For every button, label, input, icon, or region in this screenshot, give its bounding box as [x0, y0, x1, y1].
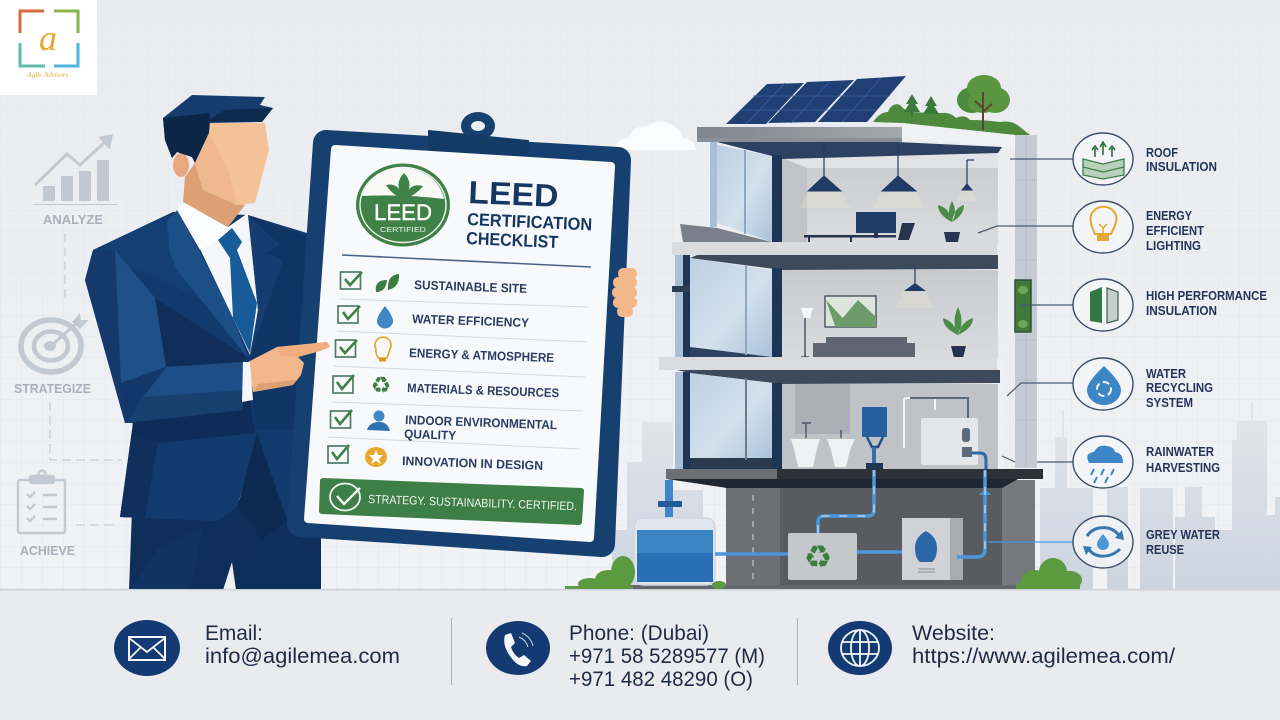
feature: energy efficient lighting: ENERGY: [1146, 209, 1193, 223]
logo box: a: [39, 18, 57, 58]
LEED badge: [356, 164, 450, 246]
blue pump unit: [862, 407, 887, 469]
contact: phone: Phone: (Dubai): [569, 622, 709, 645]
floor 1 room: [680, 142, 1002, 244]
holding hand: [612, 268, 637, 317]
feature: roof insulation: ROOF: [1146, 146, 1178, 160]
row: sustainable site: SUSTAINABLE SITE: [414, 278, 527, 296]
feature: grey water reuse: REUSE: [1146, 543, 1184, 557]
floor 3 utility room: [675, 372, 998, 469]
jacket: [85, 212, 320, 521]
row: materials and resources: MATERIALS & RESOURCES: [407, 381, 559, 400]
feature: water recycling system: [1073, 358, 1213, 410]
feature: rainwater harvesting: [1073, 436, 1220, 488]
sofa: [813, 337, 915, 358]
row: water efficiency: WATER EFFICIENCY: [412, 312, 530, 330]
water storage tank: [634, 480, 715, 585]
floor slab 2: [659, 357, 997, 370]
analyze chart icon: [33, 134, 117, 205]
row: energy and atmosphere: ENERGY & ATMOSPHERE: [409, 346, 554, 365]
pendant lamps: [808, 144, 974, 191]
businessman: [85, 95, 321, 590]
background skyline left: [612, 422, 703, 590]
right lapel: [248, 215, 283, 357]
background skyline right: [1040, 402, 1280, 590]
dark torso panel: [155, 298, 248, 367]
row: energy and atmosphere: [336, 337, 554, 365]
neck: [183, 163, 245, 227]
trousers: [129, 500, 321, 590]
feature: roof insulation: [1073, 133, 1217, 185]
feature: energy efficient lighting: [1073, 201, 1204, 253]
contact: email: info@agilemea.com: [205, 645, 400, 668]
clipboard board: [300, 143, 618, 544]
feature: high performance insulation: [1073, 279, 1267, 331]
office plant: [938, 201, 964, 242]
analyze label: ANALYZE: [43, 212, 103, 227]
pointing hand: [242, 342, 330, 402]
bush right: [1016, 558, 1082, 590]
logo box: [0, 0, 97, 95]
right concrete column: [1015, 135, 1037, 468]
green banner: [322, 481, 581, 522]
sleeve: [85, 250, 243, 423]
floor 2 room: [672, 255, 998, 358]
checklist title: [466, 174, 593, 252]
feature: rainwater harvesting: RAINWATER: [1146, 445, 1214, 459]
contact: phone: +971 58 5289577 (M): [569, 645, 765, 668]
contact: phone: +971 482 48290 (O): [569, 668, 753, 691]
feature: high performance insulation: HIGH PERFORMANCE: [1146, 289, 1267, 303]
floor lamp: [801, 308, 813, 318]
feature: water recycling system: SYSTEM: [1146, 396, 1193, 410]
green roof plants: [873, 75, 1030, 135]
achieve label: ACHIEVE: [20, 543, 75, 558]
strategize label: STRATEGIZE: [14, 381, 91, 396]
achieve clipboard icon: [18, 470, 65, 533]
row: sustainable site: [340, 272, 527, 296]
footer band: [0, 589, 1280, 720]
checklist title: LEED: [468, 174, 559, 214]
shirt: [178, 203, 258, 355]
shirt cuff: [242, 362, 253, 402]
green wall panel: [1015, 280, 1031, 332]
water system appliance: [904, 398, 986, 469]
rooftop tree: [957, 75, 1010, 113]
row: materials and resources: [333, 373, 559, 400]
strategize target icon: [21, 313, 89, 372]
desk and monitor: [804, 212, 915, 242]
roof slab: [697, 127, 902, 138]
leader lines: [978, 159, 1073, 542]
contact: website: [828, 621, 1175, 675]
LEED badge: LEED: [374, 200, 432, 225]
row: indoor environmental quality: QUALITY: [404, 427, 457, 443]
contact: phone: [486, 621, 765, 691]
row: innovation in design: [328, 445, 543, 473]
living plant: [943, 307, 973, 358]
LEED badge: CERTIFIED: [380, 225, 427, 234]
feature: energy efficient lighting: LIGHTING: [1146, 239, 1201, 253]
title rule: [342, 255, 591, 267]
recycling unit: [788, 533, 857, 580]
clipboard: [300, 112, 637, 544]
contact: website: https://www.agilemea.com/: [912, 645, 1175, 668]
row: materials and resources: ♻: [371, 373, 391, 399]
row: water efficiency: [338, 306, 530, 330]
checklist title: CERTIFICATION: [467, 209, 593, 234]
contact: email: Email:: [205, 622, 263, 645]
bush left: [565, 556, 726, 590]
feature: water recycling system: WATER: [1146, 367, 1186, 381]
tie: [218, 228, 257, 353]
feature: water recycling system: RECYCLING: [1146, 381, 1213, 395]
wall picture: [825, 296, 876, 327]
sinks: [791, 423, 855, 467]
clipboard ring and clip: [461, 112, 495, 140]
feature: energy efficient lighting: EFFICIENT: [1146, 224, 1204, 238]
building cross-section: [565, 75, 1082, 590]
lamp glow: [800, 190, 977, 208]
contact: website: Website:: [912, 622, 995, 645]
feature: grey water reuse: GREY WATER: [1146, 528, 1220, 542]
floor slab 1: [672, 242, 997, 255]
checklist paper: [308, 149, 611, 538]
water pipes: [715, 470, 991, 557]
contact: email: [114, 620, 400, 676]
ear: [173, 153, 189, 177]
feature: rainwater harvesting: HARVESTING: [1146, 461, 1220, 475]
ceiling lamp: [896, 291, 934, 308]
ground line: [618, 585, 1020, 589]
basement: [726, 480, 1035, 585]
face: [195, 123, 269, 205]
pressure tank unit: [902, 518, 963, 580]
row: indoor environmental quality: [330, 410, 558, 443]
feature: roof insulation: INSULATION: [1146, 160, 1217, 174]
row: innovation in design: INNOVATION IN DESIGN: [402, 454, 543, 473]
cloud: [614, 122, 696, 150]
solar panels: [723, 75, 912, 125]
process icons column: [14, 134, 122, 558]
feature: high performance insulation: INSULATION: [1146, 304, 1217, 318]
ground floor slab: [666, 469, 777, 479]
feature: grey water reuse: [1073, 516, 1220, 568]
green banner: STRATEGY. SUSTAINABILITY. CERTIFIED.: [368, 492, 577, 513]
row: indoor environmental quality: INDOOR ENVIRONMENTAL: [405, 413, 558, 432]
left lapel: [167, 210, 248, 358]
hair: [163, 95, 273, 163]
checklist title: CHECKLIST: [466, 228, 559, 252]
logo box: Agile Advisors: [27, 71, 69, 79]
recycling unit: ♻: [804, 538, 832, 576]
